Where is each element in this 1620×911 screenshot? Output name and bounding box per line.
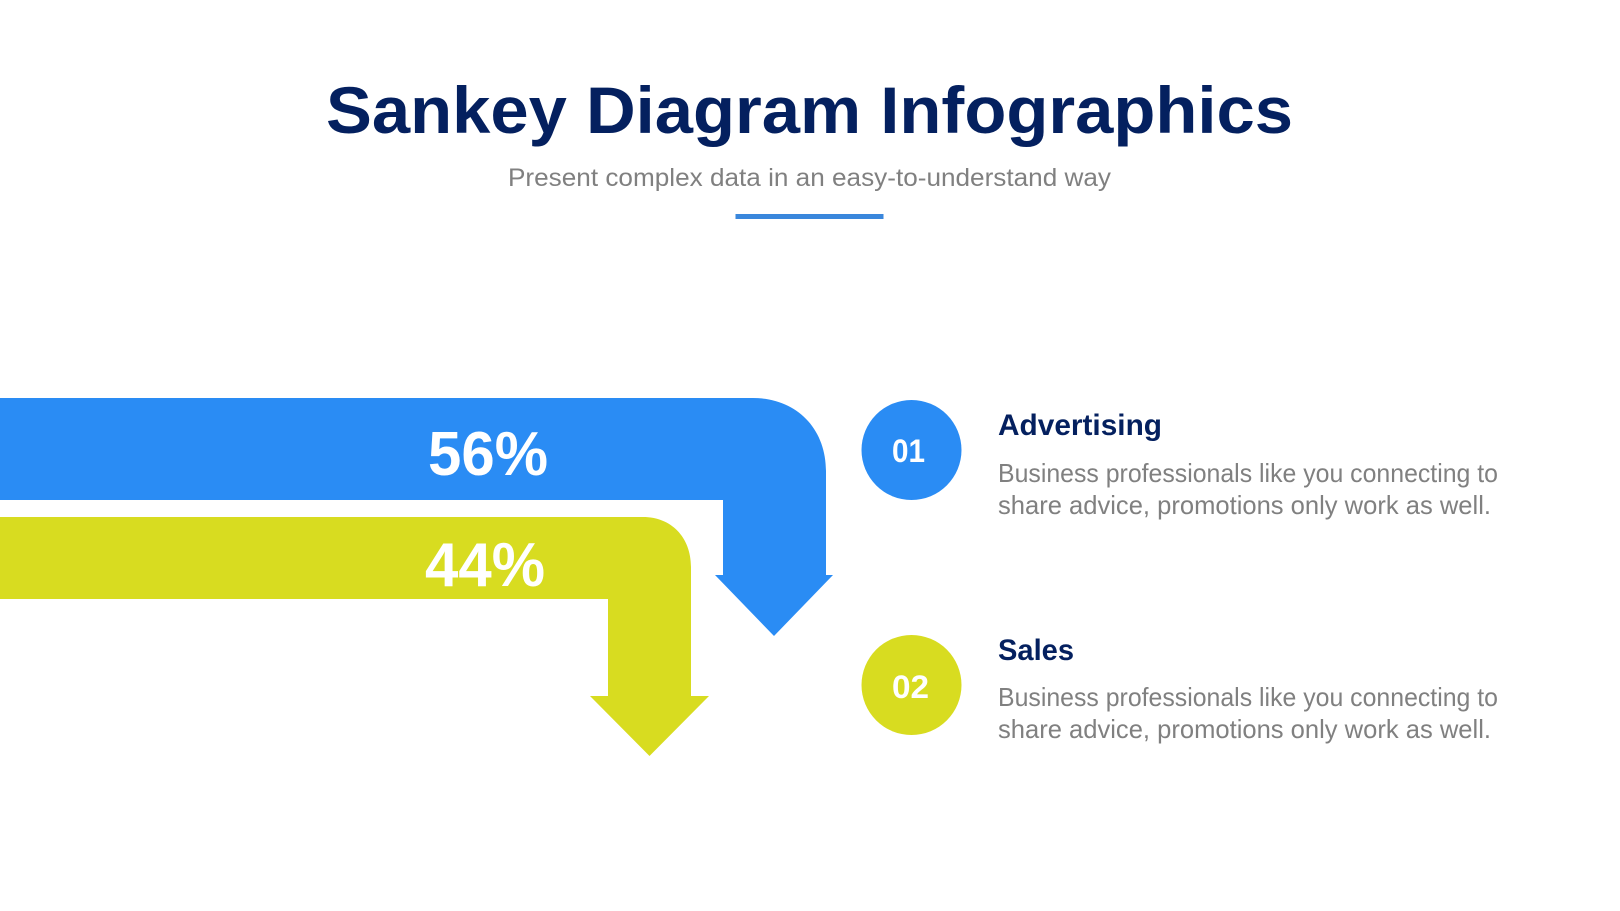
description: Advertising <box>998 458 1498 520</box>
description: Sales: share advice, promotions only work as well. <box>998 714 1491 744</box>
title underline <box>736 214 884 219</box>
item 02: Sales <box>862 634 1498 744</box>
heading: Sales: Sales <box>998 634 1074 667</box>
description: Advertising: share advice, promotions only work as well. <box>998 490 1491 520</box>
badge 01: 01 <box>892 433 925 469</box>
description: Sales: Business professionals like you connecting to <box>998 682 1498 712</box>
badge 01 <box>862 400 962 500</box>
description: Sales <box>998 682 1498 744</box>
title: Sankey Diagram Infographics <box>326 73 1293 147</box>
item 01: Advertising <box>862 400 1498 520</box>
badge 02 <box>862 635 962 735</box>
description: Advertising: Business professionals like you connecting to <box>998 458 1498 488</box>
heading: Advertising: Advertising <box>998 409 1162 442</box>
badge 02: 02 <box>892 669 929 705</box>
value: 44%: 44% <box>425 531 545 600</box>
value: 56%: 56% <box>428 420 548 489</box>
subtitle: Present complex data in an easy-to-understand way <box>508 164 1112 192</box>
arrow: Sales 44% <box>0 517 709 756</box>
arrow: Advertising 56% <box>0 398 833 636</box>
